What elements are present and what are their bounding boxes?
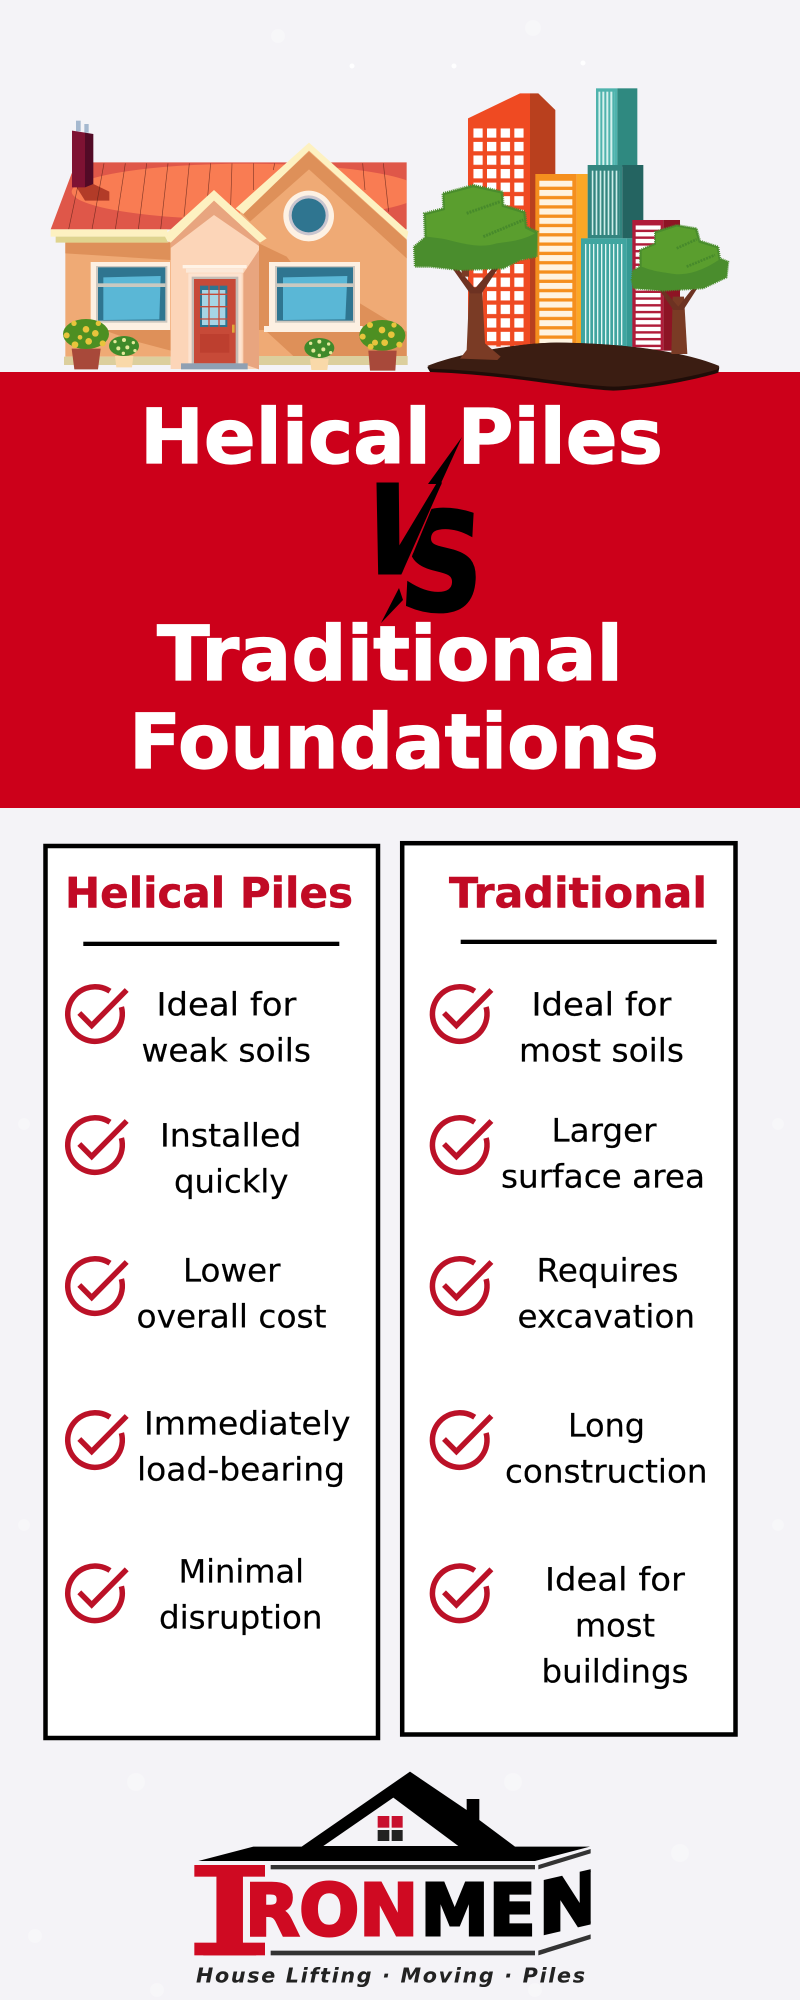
- dirt mound: [427, 343, 719, 391]
- illustration: city buildings and trees: [414, 88, 728, 391]
- item: Ideal for most buildings: most: [575, 1606, 655, 1644]
- heading divider: [83, 942, 339, 946]
- heading: Helical Piles: Helical Piles: [65, 868, 353, 918]
- VS emblem: [376, 437, 476, 623]
- logo wordmark: RON: [245, 1868, 418, 1952]
- VS slash tips: [381, 437, 462, 623]
- item: Immediately load-bearing: Immediately: [144, 1404, 350, 1442]
- heading: Traditional: Traditional: [449, 868, 707, 918]
- item: Ideal for weak soils: [68, 986, 311, 1070]
- item: Ideal for weak soils: weak soils: [142, 1032, 311, 1070]
- building: red tower: [468, 93, 555, 347]
- plant: small left: [109, 336, 139, 367]
- letter V: V: [342, 461, 465, 602]
- heading divider: [461, 940, 717, 944]
- item: Ideal for most soils: Ideal for: [532, 986, 672, 1024]
- item: Installed quickly: [68, 1116, 302, 1200]
- logo wordmark: ME: [421, 1868, 536, 1952]
- item: Lower overall cost: [68, 1252, 326, 1336]
- item: Minimal disruption: disruption: [159, 1598, 322, 1636]
- logo wordmark: I: [197, 1840, 263, 1985]
- title line: Helical Piles: Helical Piles: [140, 392, 663, 481]
- illustration: house: [51, 121, 422, 371]
- panel box: [402, 843, 736, 1734]
- item: Long construction: [432, 1406, 708, 1490]
- item: Larger surface area: [432, 1112, 705, 1196]
- item: Minimal disruption: [68, 1552, 322, 1636]
- title line: Foundations: Foundations: [129, 697, 659, 786]
- logo rails: [271, 1849, 591, 1955]
- panel: Traditional: [402, 843, 736, 1734]
- plant: small right: [304, 338, 334, 370]
- item: Ideal for most buildings: [432, 1560, 688, 1690]
- item: Installed quickly: quickly: [174, 1162, 288, 1200]
- letter S: S: [396, 484, 488, 642]
- tree: left: [414, 185, 537, 360]
- panel: Helical Piles: [46, 846, 378, 1738]
- logo I-beam: [194, 1865, 265, 1955]
- item: Long construction: construction: [505, 1452, 708, 1490]
- title line: Traditional: Traditional: [157, 609, 623, 698]
- item: Larger surface area: surface area: [501, 1158, 705, 1196]
- item: Installed quickly: Installed: [160, 1116, 302, 1154]
- item: Larger surface area: Larger: [552, 1112, 657, 1150]
- building: teal skyscraper: [581, 88, 643, 347]
- title: [129, 392, 663, 786]
- building: orange tower: [535, 174, 588, 346]
- panel box: [46, 846, 378, 1738]
- logo wordmark: [203, 1869, 591, 1956]
- item: Ideal for most soils: [432, 986, 684, 1070]
- plant: large left: [63, 319, 109, 369]
- building: maroon tower: [632, 220, 680, 351]
- item: Lower overall cost: overall cost: [136, 1298, 326, 1336]
- item: Immediately load-bearing: [68, 1404, 350, 1488]
- item: Ideal for weak soils: Ideal for: [156, 986, 297, 1024]
- plant: large right: [359, 320, 405, 371]
- tree: right: [632, 225, 728, 354]
- item: Long construction: Long: [568, 1406, 645, 1444]
- item: Requires excavation: Requires: [536, 1252, 678, 1290]
- item: Ideal for most soils: most soils: [519, 1032, 684, 1070]
- logo tagline: House Lifting · Moving · Piles: [196, 1963, 585, 1987]
- item: Requires excavation: [432, 1252, 695, 1336]
- item: Immediately load-bearing: load-bearing: [137, 1450, 345, 1488]
- red title band: [0, 372, 800, 808]
- item: Ideal for most buildings: Ideal for: [545, 1560, 686, 1598]
- logo roof: [198, 1772, 590, 1861]
- item: Lower overall cost: Lower: [183, 1252, 281, 1290]
- logo wordmark: N: [538, 1855, 602, 1953]
- logo: Iron Men: [194, 1772, 602, 1987]
- item: Minimal disruption: Minimal: [178, 1552, 304, 1590]
- item: Requires excavation: excavation: [518, 1298, 695, 1336]
- item: Ideal for most buildings: buildings: [542, 1652, 688, 1690]
